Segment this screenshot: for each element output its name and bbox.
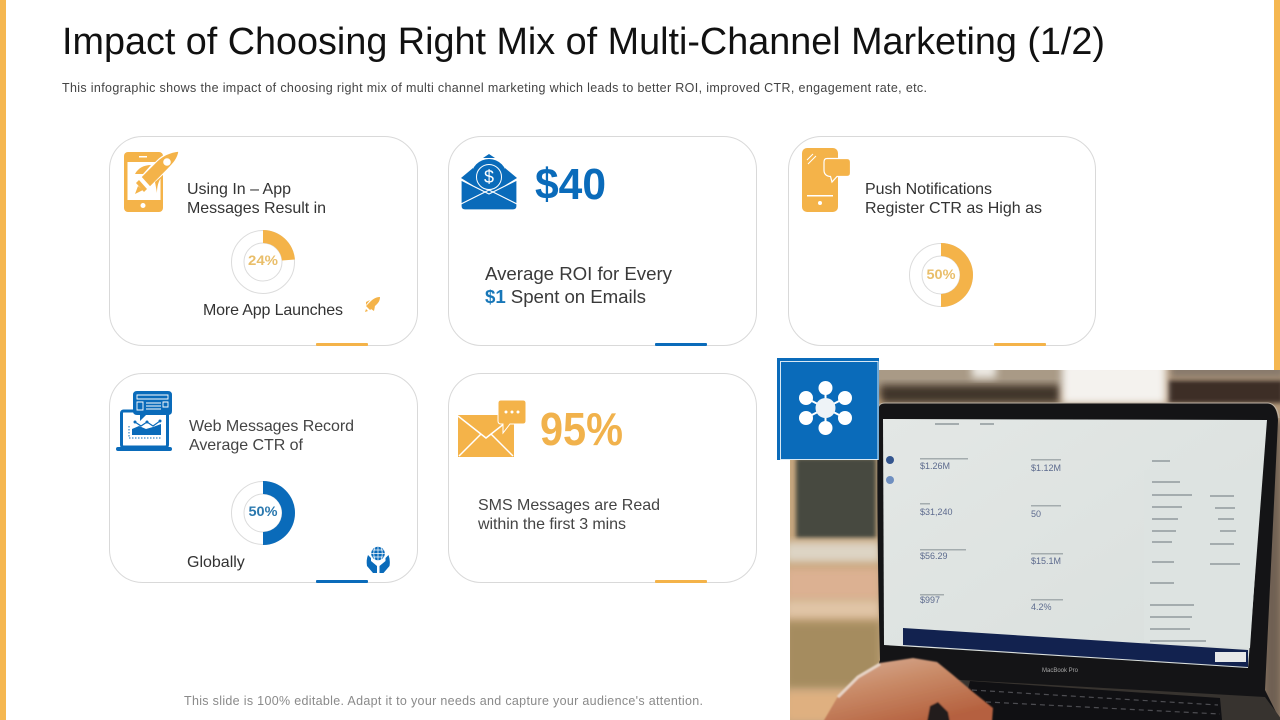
text: average ROI: [485, 263, 673, 307]
laptop: [860, 403, 1280, 720]
footer note: This slide is 100% editable. Adapt it to your needs and capture your audience's attention.: [184, 694, 703, 708]
text: push notifications: [865, 181, 1042, 217]
text: SMS messages: within the first 3 mins: [477, 516, 626, 533]
dashboard figures: $1.12M: [1031, 463, 1061, 473]
left accent band: [0, 0, 6, 720]
text: using in-app messages: Messages Result in: [187, 200, 326, 217]
icon: envelope with dollar: [461, 154, 517, 210]
subtitle: This infographic shows the impact of choosing right mix of multi channel marketing which leads to better ROI, improved CTR, engagement rate, etc.: [62, 81, 927, 95]
text: push notifications: Register CTR as High as: [865, 200, 1042, 217]
text: SMS messages: SMS Messages are Read: [478, 497, 660, 514]
icon: laptop with chart: [116, 391, 172, 451]
text: more app launches: More App Launches: [203, 302, 343, 319]
text: web messages: Average CTR of: [189, 437, 304, 454]
dashboard figures: $56.29: [920, 551, 948, 561]
icon: phone with speech bubble: [802, 148, 850, 212]
dashboard figures: 50: [1031, 509, 1041, 519]
icon: hands holding globe: [367, 547, 390, 573]
title: Impact of Choosing Right Mix of Multi-Channel Marketing (1/2): [62, 21, 1105, 63]
donut chart: 50%: 50%: [248, 503, 278, 519]
donut chart: 50%: [232, 481, 295, 545]
dashboard figures: [920, 461, 1061, 612]
donut chart: 50%: 50%: [926, 266, 956, 282]
text: globally: Globally: [187, 554, 245, 571]
dashboard figures: $997: [920, 595, 940, 605]
icon badge: network: [777, 358, 879, 460]
accent bar: [655, 343, 707, 346]
screen: [883, 419, 1267, 668]
dashboard figures: 4.2%: [1031, 602, 1052, 612]
text: average ROI: $1 Spent on Emails: [485, 286, 646, 307]
icon: phone with rocket: [124, 151, 179, 212]
big number: 95%: 95%: [540, 403, 623, 455]
icon: small rocket: [365, 297, 380, 312]
accent bar: [655, 580, 707, 583]
right accent band: [1274, 0, 1280, 371]
photo background: [780, 360, 1280, 720]
photo: laptop dashboard: [780, 360, 1280, 720]
accent bar: [994, 343, 1046, 346]
dashboard figures: $15.1M: [1031, 556, 1061, 566]
hand: [823, 658, 993, 720]
text: using in-app messages: [187, 181, 326, 217]
dashboard figures: $1.26M: [920, 461, 950, 471]
icon: envelope with chat bubble: [458, 400, 526, 457]
donut chart: 24%: [232, 230, 295, 294]
donut chart: 50%: [910, 243, 973, 307]
laptop brand label: MacBook Pro: [1042, 668, 1079, 674]
accent bar: [316, 580, 368, 583]
dashboard figures: $31,240: [920, 507, 953, 517]
donut chart: 24%: 24%: [248, 252, 279, 268]
text: average ROI: Average ROI for Every: [485, 263, 673, 284]
dashboard list: [920, 423, 1240, 642]
panel: email ROI: [448, 136, 756, 346]
icon: envelope with dollar: $: [484, 167, 494, 187]
big number: $40: $40: [535, 160, 606, 209]
text: web messages: [189, 418, 354, 454]
panel: web messages: [110, 374, 418, 583]
text: web messages: Web Messages Record: [189, 418, 354, 435]
text: SMS messages: [477, 497, 660, 533]
panel: SMS messages: [448, 374, 756, 583]
text: push notifications: Push Notifications: [865, 181, 992, 198]
panel: in-app messages: [110, 136, 418, 346]
text: using in-app messages: Using In – App: [187, 181, 291, 198]
panel: push notifications: [788, 136, 1096, 346]
accent bar: [316, 343, 368, 346]
